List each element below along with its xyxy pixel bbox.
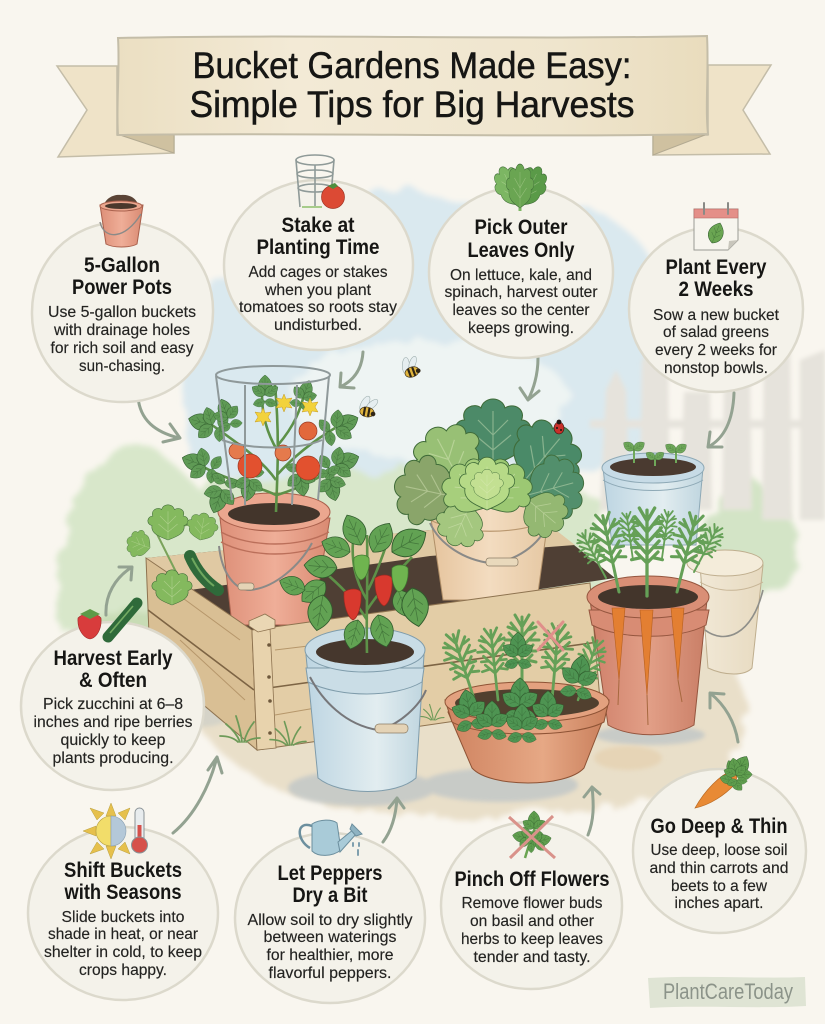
text block: with drainage holes (53, 322, 190, 339)
raised wooden crate, back and soil (146, 524, 615, 632)
plant: lettuce and kale (387, 399, 596, 556)
text block: Sow a new bucket (653, 307, 780, 324)
text block (44, 909, 202, 979)
bucket: peppers (305, 628, 426, 792)
terracotta herb pot (445, 682, 609, 783)
text block: Allow soil to dry slightly (248, 912, 412, 929)
heading: & Often (79, 669, 147, 692)
heading (468, 216, 575, 262)
panel: go deep and thin (633, 748, 806, 933)
arrow: plant to seedlings (708, 393, 734, 447)
ladybug (554, 420, 564, 434)
text block: sun-chasing. (79, 358, 165, 375)
heading (72, 254, 172, 299)
watermark: PlantCareToday (663, 979, 793, 1004)
panel: harvest early and often (21, 603, 204, 790)
text block: undisturbed. (274, 317, 362, 334)
heading: Shift Buckets (64, 859, 182, 882)
text block: On lettuce, kale, and (450, 267, 592, 284)
grass tufts (220, 704, 444, 745)
bucket: salad seedlings (602, 439, 704, 545)
text block: when you plant (264, 282, 372, 299)
bucket: carrots with visible roots (572, 508, 728, 735)
panel: shift buckets with seasons (28, 803, 218, 1000)
plant: pepper (277, 510, 432, 653)
panel: pick outer leaves only (429, 161, 613, 358)
icon: terracotta bucket (100, 195, 143, 247)
tomato cage (216, 366, 330, 505)
heading (666, 256, 767, 301)
text block: Remove flower buds (462, 895, 602, 912)
heading: Planting Time (256, 236, 380, 259)
heading: Pick Outer (474, 216, 568, 239)
text block (653, 307, 780, 377)
title: Simple Tips for Big Harvests (190, 84, 634, 125)
heading (64, 859, 182, 904)
text block: on basil and other (470, 913, 595, 930)
plant: tomato in cage (176, 375, 366, 519)
heading: Go Deep & Thin (650, 815, 788, 838)
heading: Let Peppers (278, 862, 382, 885)
text block: plants producing. (52, 750, 174, 767)
text block: Slide buckets into (62, 909, 185, 926)
heading: Stake at (282, 214, 355, 237)
arrow: shift to buckets (173, 757, 222, 833)
text block: for healthier, more (266, 947, 394, 964)
icon: strawberry and zucchini (78, 603, 137, 639)
text block: flavorful peppers. (268, 965, 392, 982)
arrow: stake to tomato (340, 352, 363, 388)
text block (34, 696, 192, 767)
watermark (648, 977, 806, 1008)
text block: tomatoes so roots stay (239, 299, 397, 316)
text block (650, 842, 788, 912)
text block (444, 267, 598, 337)
bucket: lettuce (429, 505, 550, 600)
text block: crops happy. (79, 962, 167, 979)
title (190, 45, 634, 125)
icon: herb sprig crossed out (509, 811, 555, 858)
heading (54, 647, 173, 692)
text block (248, 912, 412, 982)
icon: lettuce leaf (488, 161, 553, 211)
text block: and thin carrots and (650, 860, 788, 877)
arrow: pick to lettuce (520, 358, 539, 400)
text block: herbs to keep leaves (461, 931, 603, 948)
text block: Add cages or stakes (248, 264, 388, 281)
heading: Plant Every (666, 256, 767, 279)
plant: zucchini vine (123, 505, 220, 605)
icon: carrot (695, 748, 761, 808)
watercolor garden backdrop (58, 192, 825, 814)
title banner (57, 36, 771, 157)
text block (239, 264, 397, 334)
heading: 2 Weeks (678, 278, 754, 301)
plant: herbs with flower (437, 615, 611, 744)
text block (461, 895, 603, 966)
title: Bucket Gardens Made Easy: (192, 45, 632, 86)
arrow: peppers to bucket (383, 798, 404, 842)
bucket: tomato (218, 493, 330, 625)
heading: Power Pots (72, 276, 172, 299)
text block: Pick zucchini at 6–8 (43, 696, 183, 713)
text block: inches apart. (674, 895, 764, 912)
raised wooden crate, front (146, 558, 600, 750)
text block: shelter in cold, to keep (44, 944, 202, 961)
arrow: harvest to zucchini (106, 567, 132, 615)
icon: cage and tomato (296, 155, 344, 208)
text block: nonstop bowls. (664, 360, 768, 377)
text block: keeps growing. (468, 320, 574, 337)
panel: plant every 2 weeks (629, 203, 803, 392)
carrot tops (572, 508, 728, 596)
text block: every 2 weeks for (655, 342, 778, 359)
text block: tender and tasty. (474, 949, 590, 966)
bucket: cream at back (687, 550, 763, 674)
heading: Leaves Only (468, 239, 575, 262)
text block: inches and ripe berries (34, 714, 192, 731)
arrow: pinch to herbs (584, 787, 600, 835)
arrow: carrots (710, 693, 738, 742)
bees (357, 352, 424, 419)
text block: between waterings (264, 929, 396, 946)
text block: shade in heat, or near (48, 926, 199, 943)
text block: of salad greens (663, 324, 769, 341)
heading: with Seasons (64, 881, 182, 904)
text block: spinach, harvest outer (444, 284, 598, 301)
icon: sun and thermometer (83, 803, 148, 859)
text block: quickly to keep (60, 732, 166, 749)
panel: 5-gallon power pots (32, 195, 213, 402)
icon: watering can (300, 820, 362, 855)
heading (278, 862, 382, 907)
heading: Dry a Bit (292, 884, 368, 907)
icon: calendar (694, 203, 738, 250)
text block: Use deep, loose soil (650, 842, 788, 859)
text block: beets to a few (671, 878, 767, 895)
panel: stake at planting time (224, 155, 413, 350)
text block: leaves so the center (452, 302, 590, 319)
heading: Harvest Early (54, 647, 173, 670)
heading (256, 214, 380, 259)
text block: for rich soil and easy (50, 340, 194, 357)
arrow: 5-gallon to buckets (138, 397, 180, 442)
heading: 5-Gallon (84, 254, 160, 277)
heading: Pinch Off Flowers (454, 868, 610, 891)
text block (48, 304, 196, 375)
panel: pinch off flowers (441, 811, 622, 989)
text block: Use 5-gallon buckets (48, 304, 196, 321)
seedlings (621, 439, 689, 466)
panel: let peppers dry a bit (235, 820, 425, 1003)
